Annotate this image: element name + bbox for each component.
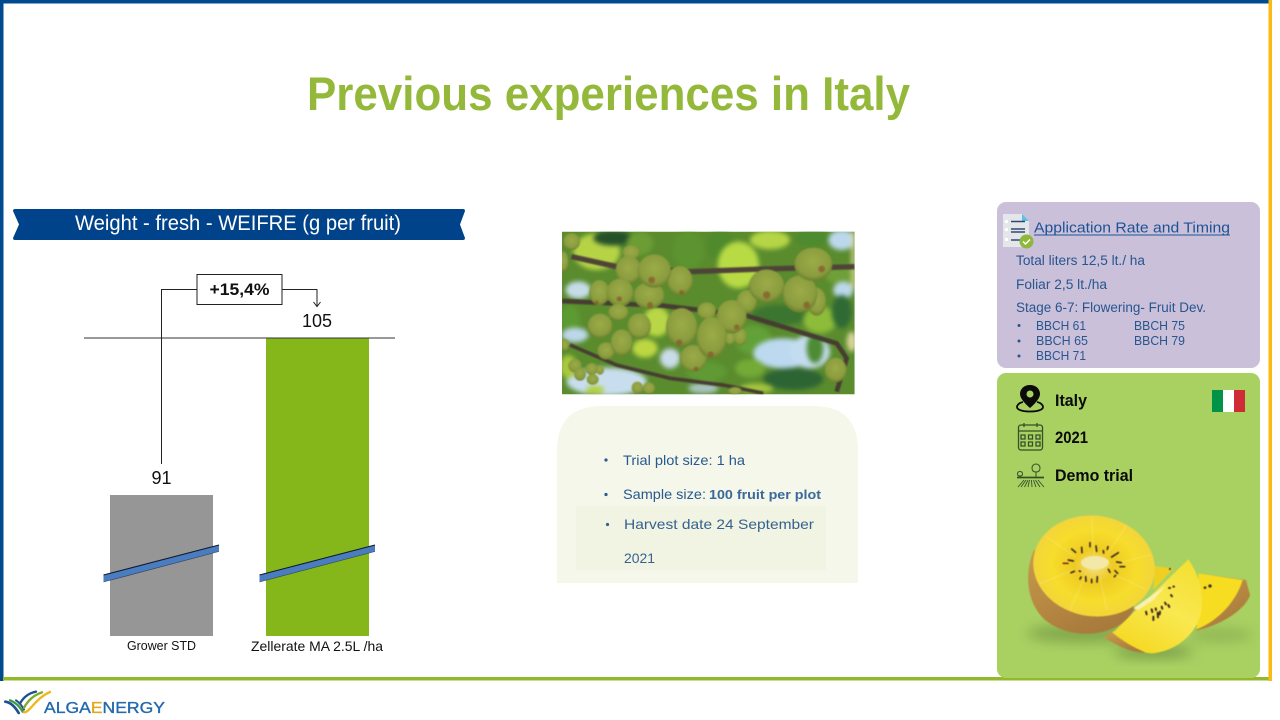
chart banner heading bbox=[13, 209, 465, 240]
difference callout: +15,4% bbox=[210, 280, 270, 299]
panel heading: Application Rate and Timing bbox=[1034, 220, 1230, 236]
demo trial label: Demo trial bbox=[1055, 467, 1133, 485]
BBCH stage list: BBCH 79 bbox=[1134, 333, 1185, 348]
BBCH stage list: BBCH 61 bbox=[1036, 318, 1086, 333]
axis break: grey bar bbox=[104, 545, 219, 582]
icon: Italian flag bbox=[1212, 390, 1245, 412]
BBCH stage list: BBCH 71 bbox=[1036, 348, 1086, 363]
logo mark bbox=[5, 692, 50, 713]
bar: Grower STD: Grower STD bbox=[127, 639, 196, 653]
panel: application rate and timing bbox=[997, 202, 1260, 368]
axis break: green bar bbox=[260, 545, 375, 582]
list: trial plot size: Trial plot size: 1 ha bbox=[623, 452, 745, 468]
panel: trial location and type bbox=[997, 373, 1260, 678]
bar: Grower STD: 91 bbox=[151, 468, 172, 488]
list: harvest date: 2021 bbox=[624, 550, 655, 566]
BBCH stage list bbox=[1018, 318, 1185, 363]
bar: Zellerate MA: 105 bbox=[302, 311, 332, 331]
list: sample size: Sample size: bbox=[623, 486, 706, 502]
list: harvest date bbox=[606, 516, 814, 566]
bar: Zellerate MA: Zellerate MA 2.5L /ha bbox=[251, 638, 383, 654]
icon: field with tree bbox=[1017, 464, 1044, 487]
logo: AlgaEnergy bbox=[5, 692, 165, 717]
icon: calendar bbox=[1018, 423, 1042, 450]
icon: location pin bbox=[1017, 385, 1043, 412]
rate text: Stage 6-7: Flowering- Fruit Dev. bbox=[1016, 300, 1206, 315]
logo wordmark: ALGA ENERGY bbox=[44, 700, 165, 717]
location label: Italy bbox=[1055, 392, 1088, 410]
rate text: Total liters 12,5 lt./ ha bbox=[1016, 253, 1145, 268]
bar: Grower STD bbox=[110, 468, 213, 653]
icon: checklist document bbox=[1003, 214, 1034, 248]
list: sample size: 100 fruit per plot bbox=[709, 487, 822, 502]
illustration: golden kiwi bbox=[1027, 508, 1253, 656]
difference callout bbox=[197, 274, 282, 304]
photo: kiwifruit on the vine bbox=[558, 230, 862, 396]
bar: Zellerate MA bbox=[251, 311, 383, 654]
bar chart: fruit weight bbox=[84, 274, 395, 654]
rate text: Foliar 2,5 lt./ha bbox=[1016, 277, 1107, 292]
year label: 2021 bbox=[1055, 429, 1088, 447]
chart banner heading: Weight - fresh - WEIFRE (g per fruit) bbox=[75, 212, 401, 235]
panel: trial details bbox=[557, 406, 858, 583]
list: harvest date: Harvest date 24 September bbox=[624, 516, 814, 532]
title: Previous experiences in Italy bbox=[307, 67, 910, 120]
list: sample size bbox=[604, 486, 822, 502]
BBCH stage list: BBCH 75 bbox=[1134, 318, 1185, 333]
difference arrow bbox=[162, 290, 320, 464]
BBCH stage list: BBCH 65 bbox=[1036, 333, 1088, 348]
rate text bbox=[1016, 253, 1206, 315]
